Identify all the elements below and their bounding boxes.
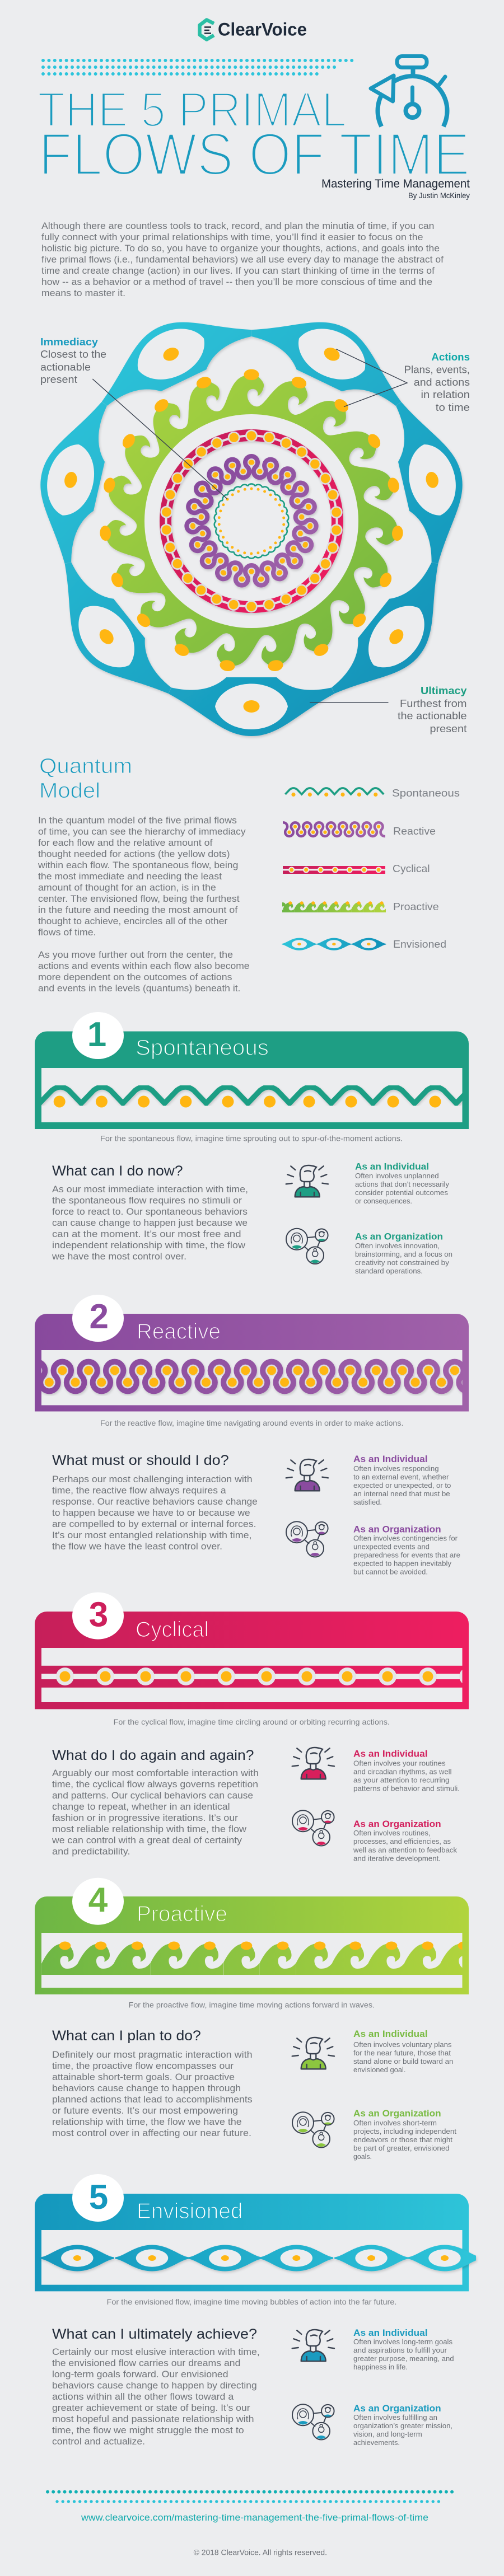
title: FLOWS OF TIME bbox=[39, 120, 470, 188]
quantum model text: flows of time. bbox=[38, 928, 96, 938]
body text: Perhaps our most challenging interaction with bbox=[52, 1474, 253, 1484]
body text: greater achievement or state of being. It’s our bbox=[52, 2403, 250, 2413]
body text: we can control with a great deal of certainty bbox=[52, 1835, 242, 1846]
body text: independent relationship with time, the flow bbox=[52, 1240, 245, 1250]
as an organization: well as an attention to feedback bbox=[353, 1846, 458, 1854]
body text: can cause change to happen just because we bbox=[52, 1218, 248, 1228]
caption: For the cyclical flow, imagine time circling around or orbiting recurring actions. bbox=[114, 1717, 390, 1726]
as an organization bbox=[353, 2109, 456, 2161]
intro text: five primal flows (i.e., fundamental behaviors) we all use every day to manage the abstract of bbox=[41, 255, 444, 265]
subtitle and byline: Mastering Time Management bbox=[321, 177, 470, 190]
as an individual: happiness in life. bbox=[353, 2363, 408, 2371]
icon: organization bbox=[292, 2112, 334, 2147]
banner: 5 bbox=[89, 2178, 108, 2217]
question heading: What can I ultimately achieve? bbox=[52, 2326, 257, 2342]
as an organization: be part of greater, envisioned bbox=[353, 2144, 449, 2152]
legend: reactive: Reactive bbox=[393, 826, 436, 837]
callout: actions: in relation bbox=[421, 389, 470, 400]
icon: individual bbox=[286, 1165, 328, 1197]
body text: behaviors cause change to happen through bbox=[52, 2083, 241, 2093]
body text: Definitely our most pragmatic interaction with bbox=[52, 2050, 253, 2060]
legend bbox=[279, 788, 460, 954]
panel: 2 reactive bbox=[27, 1295, 477, 1576]
banner: 2 bbox=[90, 1298, 109, 1336]
quantum model text: thought needed for actions (the yellow dots) bbox=[38, 849, 230, 859]
copyright: © 2018 ClearVoice. All rights reserved. bbox=[194, 2548, 327, 2557]
as an individual: greater purpose, meaning, and bbox=[353, 2354, 454, 2363]
banner: 4 bbox=[88, 1881, 108, 1919]
quantum model text: within each flow. The spontaneous flow, being bbox=[38, 860, 238, 870]
icon: individual bbox=[292, 2038, 334, 2069]
ring: cyclical flow bbox=[166, 435, 337, 607]
flow pattern: cyclical bbox=[41, 1666, 470, 1688]
intro text: fully connect with your primal relationships with time, you’ll find it easier to focus on the bbox=[41, 232, 423, 242]
as an individual: patterns of behavior and stimuli. bbox=[353, 1785, 460, 1792]
as an organization: As an Organization bbox=[353, 1525, 441, 1535]
banner: 3 bbox=[89, 1595, 108, 1634]
caption: For the spontaneous flow, imagine time sprouting out to spur-of-the-moment actions. bbox=[100, 1134, 403, 1143]
body text: planned actions that lead to accomplishments bbox=[52, 2095, 253, 2105]
quantum model text: more dependent on the outcomes of actions bbox=[38, 972, 232, 982]
icon: individual bbox=[286, 1459, 328, 1491]
question heading: What can I do now? bbox=[52, 1163, 183, 1179]
intro text: how -- as a behavior or a method of travel -- then you’ll be more conscious of time and the bbox=[41, 277, 432, 287]
body text: the spontaneous flow requires no stimuli or bbox=[52, 1196, 242, 1206]
body text: most reliable relationship with time, the flow bbox=[52, 1824, 246, 1834]
body text bbox=[52, 1184, 248, 1262]
as an individual: satisfied. bbox=[353, 1498, 382, 1506]
caption: For the envisioned flow, imagine time moving bubbles of action into the far future. bbox=[107, 2297, 396, 2306]
body text: Certainly our most elusive interaction with time, bbox=[52, 2347, 260, 2357]
heading: quantum model: Quantum bbox=[39, 755, 132, 778]
banner: Envisioned bbox=[137, 2199, 242, 2223]
as an organization: expected to happen inevitably bbox=[353, 1559, 452, 1568]
body text: fashion or in progressive iterations. It’s our bbox=[52, 1813, 239, 1823]
as an individual: and circadian rhythms, as well bbox=[353, 1768, 451, 1776]
decorative dotted rows bbox=[43, 60, 355, 74]
icon: organization bbox=[286, 1229, 328, 1264]
body text: change to repeat, whether in an identical bbox=[52, 1802, 230, 1812]
ring: proactive flow bbox=[95, 364, 409, 677]
question heading: What do I do again and again? bbox=[52, 1748, 254, 1763]
as an organization: Often involves short-term bbox=[353, 2119, 437, 2127]
callout: ultimacy: present bbox=[430, 723, 467, 734]
title: THE 5 PRIMAL bbox=[38, 82, 347, 137]
as an individual: As an Individual bbox=[353, 2029, 428, 2039]
icon: individual bbox=[292, 1748, 334, 1779]
body text: most control over in affecting our near future. bbox=[52, 2128, 251, 2138]
quantum model text: in the future and needing the most amount of bbox=[38, 905, 238, 915]
ring: envisioned flow bbox=[40, 322, 464, 738]
logo: ClearVoice: ClearVoice bbox=[218, 19, 307, 39]
leader lines bbox=[92, 349, 407, 702]
body text: long-term goals forward. Our envisioned bbox=[52, 2369, 228, 2380]
body text: time, the proactive flow encompasses our bbox=[52, 2061, 234, 2071]
body text: control and actualize. bbox=[52, 2437, 145, 2447]
as an organization bbox=[353, 1819, 458, 1863]
legend: spontaneous: Spontaneous bbox=[392, 788, 460, 799]
legend: proactive: Proactive bbox=[393, 901, 439, 912]
callout: actions: and actions bbox=[414, 377, 470, 388]
banner: Reactive bbox=[137, 1319, 221, 1343]
as an organization: Often involves innovation, bbox=[355, 1242, 440, 1250]
as an organization: projects, including independent bbox=[353, 2127, 456, 2135]
heading: quantum model bbox=[39, 755, 132, 803]
caption: For the reactive flow, imagine time navigating around events in order to make actions. bbox=[100, 1418, 403, 1427]
as an organization: As an Organization bbox=[353, 2404, 441, 2414]
body text: we have the most control over. bbox=[52, 1252, 186, 1262]
body text: and predictability. bbox=[52, 1847, 130, 1857]
as an organization bbox=[353, 1525, 460, 1576]
intro text: means to master it. bbox=[41, 288, 125, 298]
as an individual: an internal need that must be bbox=[353, 1490, 450, 1498]
body text: the envisioned flow carries our dreams and bbox=[52, 2358, 240, 2368]
quantum model text: amount of thought for an action, is in the bbox=[38, 883, 216, 893]
as an organization: and iterative development. bbox=[353, 1854, 441, 1863]
flow pattern: proactive bbox=[41, 1941, 463, 1975]
question heading: What must or should I do? bbox=[52, 1453, 229, 1468]
as an organization bbox=[355, 1232, 452, 1275]
quantum model text: In the quantum model of the five primal flows bbox=[38, 816, 237, 826]
question heading: What can I plan to do? bbox=[52, 2028, 201, 2044]
as an organization: preparedness for events that are bbox=[353, 1551, 460, 1559]
as an organization: unexpected events and bbox=[353, 1543, 430, 1551]
body text: response. Our reactive behaviors cause change bbox=[52, 1497, 258, 1507]
banner bbox=[35, 1295, 469, 1412]
flow pattern: reactive bbox=[27, 1362, 477, 1391]
banner bbox=[35, 1012, 469, 1129]
banner: Proactive bbox=[137, 1902, 227, 1926]
footer dotted rows bbox=[48, 2492, 457, 2502]
diagram: quantum model of the five flows bbox=[40, 322, 464, 738]
as an individual: consider potential outcomes bbox=[355, 1188, 448, 1197]
body text: As our most immediate interaction with time, bbox=[52, 1184, 248, 1195]
callout: actions: Actions bbox=[431, 352, 470, 363]
as an organization: processes, and efficiencies, as bbox=[353, 1837, 451, 1846]
legend: cyclical: Cyclical bbox=[393, 863, 430, 874]
quantum model text bbox=[38, 816, 250, 994]
legend: spontaneous bbox=[285, 788, 460, 799]
as an organization: Often involves routines, bbox=[353, 1829, 431, 1837]
body text: Arguably our most comfortable interaction with bbox=[52, 1768, 259, 1778]
as an organization: brainstorming, and a focus on bbox=[355, 1250, 452, 1258]
callout: immediacy: present bbox=[40, 374, 77, 385]
as an individual: envisioned goal. bbox=[353, 2066, 405, 2074]
body text: or future events. It’s our most empowering bbox=[52, 2106, 238, 2116]
as an individual: expected or unexpected, or to bbox=[353, 1481, 451, 1490]
subtitle and byline bbox=[321, 177, 470, 200]
body text: behaviors cause change to happen by directing bbox=[52, 2381, 257, 2391]
body text: and patterns. Our cyclical behaviors can cause bbox=[52, 1791, 253, 1801]
flow pattern: envisioned bbox=[41, 2245, 478, 2274]
as an individual bbox=[353, 2328, 454, 2371]
callout: ultimacy bbox=[398, 685, 467, 734]
banner bbox=[35, 1878, 469, 1994]
legend: cyclical bbox=[283, 863, 430, 874]
panel: 4 proactive bbox=[35, 1878, 469, 2161]
flow pattern: spontaneous bbox=[40, 1087, 498, 1107]
as an organization: organization’s greater mission, bbox=[353, 2422, 452, 2430]
title bbox=[38, 82, 470, 188]
callout: immediacy: Immediacy bbox=[40, 336, 98, 348]
as an individual: Often involves responding bbox=[353, 1464, 439, 1473]
body text: are compelled to by external or internal forces. bbox=[52, 1519, 256, 1529]
as an individual: As an Individual bbox=[353, 1454, 428, 1464]
body text: the flow we have the least control over. bbox=[52, 1542, 222, 1552]
subtitle and byline: By Justin McKinley bbox=[408, 191, 470, 200]
body text: actions within all the other flows toward a bbox=[52, 2392, 234, 2402]
as an organization: Often involves contingencies for bbox=[353, 1534, 458, 1543]
as an individual: stand alone or build toward an bbox=[353, 2057, 453, 2066]
intro text: Although there are countless tools to track, record, and plan the minutia of time, if you can bbox=[41, 221, 435, 231]
body text: time, the cyclical flow always governs repetition bbox=[52, 1779, 258, 1790]
banner bbox=[35, 1593, 469, 1709]
as an individual: actions that don’t necessarily bbox=[355, 1180, 450, 1188]
body text bbox=[52, 2050, 253, 2138]
ring: reactive flow bbox=[184, 454, 320, 590]
icon: stopwatch bbox=[371, 56, 447, 127]
as an individual bbox=[353, 2029, 453, 2074]
quantum model text: for each flow and the relative amount of bbox=[38, 838, 213, 848]
quantum model text: As you move further out from the center, the bbox=[38, 950, 233, 960]
intro text: time and create change (action) in our lives. If you can start thinking of time in the terms of bbox=[41, 266, 435, 276]
as an organization: but cannot be avoided. bbox=[353, 1568, 428, 1576]
as an organization: As an Organization bbox=[353, 1819, 441, 1829]
body text: force to react to. Our spontaneous behaviors bbox=[52, 1207, 248, 1217]
callout: ultimacy: Furthest from bbox=[400, 698, 467, 709]
as an individual: or consequences. bbox=[355, 1197, 412, 1205]
legend: reactive bbox=[279, 822, 436, 837]
quantum model text: and events in the levels (quantums) beneath it. bbox=[38, 983, 240, 994]
quantum model text: of time, you can see the hierarchy of immediacy bbox=[38, 827, 246, 837]
as an individual bbox=[353, 1749, 460, 1792]
callout: immediacy: actionable bbox=[40, 362, 91, 373]
legend: envisioned: Envisioned bbox=[393, 939, 446, 950]
body text: most hopeful and passionate relationship with bbox=[52, 2414, 254, 2424]
callout: immediacy: Closest to the bbox=[40, 349, 106, 360]
legend: proactive bbox=[282, 901, 438, 912]
as an individual: As an Individual bbox=[353, 1749, 428, 1759]
as an organization: creativity not constrained by bbox=[355, 1258, 450, 1267]
as an individual bbox=[355, 1162, 450, 1205]
as an organization: vision, and long-term bbox=[353, 2430, 422, 2438]
legend: envisioned bbox=[282, 938, 446, 950]
quantum model text: thought to achieve, encircles all of the other bbox=[38, 916, 228, 926]
as an individual: Often involves your routines bbox=[353, 1759, 446, 1768]
body text: can at the moment. It’s our most free and bbox=[52, 1229, 241, 1239]
icon: organization bbox=[292, 2404, 334, 2439]
banner: Cyclical bbox=[136, 1618, 209, 1642]
callout: actions: to time bbox=[436, 402, 470, 413]
body text: time, the flow we might struggle the most to bbox=[52, 2425, 244, 2436]
banner: 1 bbox=[87, 1015, 106, 1054]
icon: individual bbox=[292, 2330, 334, 2361]
banner: Spontaneous bbox=[136, 1036, 269, 1060]
as an individual: Often involves long-term goals bbox=[353, 2338, 452, 2346]
callout: actions bbox=[404, 352, 470, 413]
body text bbox=[52, 2347, 260, 2447]
as an individual: as your attention to recurring bbox=[353, 1776, 449, 1785]
panel: 3 cyclical bbox=[35, 1593, 470, 1863]
as an individual: As an Individual bbox=[353, 2328, 428, 2338]
body text bbox=[52, 1474, 258, 1552]
as an individual: As an Individual bbox=[355, 1162, 429, 1172]
body text: to happen because we have to or because we bbox=[52, 1508, 250, 1518]
as an individual: Often involves unplanned bbox=[355, 1172, 439, 1180]
as an individual: and aspirations to fulfill your bbox=[353, 2346, 447, 2354]
as an individual: for the near future, those that bbox=[353, 2049, 451, 2057]
intro text: holistic big picture. To do so, you have to organize your thoughts, actions, and goals into the bbox=[41, 243, 440, 254]
as an organization: achievements. bbox=[353, 2438, 400, 2447]
body text: attainable short-term goals. Our proactive bbox=[52, 2072, 235, 2082]
heading: quantum model: Model bbox=[39, 779, 100, 803]
body text: time, the reactive flow always requires a bbox=[52, 1486, 226, 1496]
as an organization: As an Organization bbox=[355, 1232, 443, 1242]
icon: organization bbox=[292, 1810, 334, 1846]
quantum model text: center. The envisioned flow, being the furthest bbox=[38, 894, 240, 904]
intro text bbox=[41, 221, 444, 298]
caption: For the proactive flow, imagine time moving actions forward in waves. bbox=[129, 2001, 375, 2010]
as an individual: Often involves voluntary plans bbox=[353, 2040, 451, 2049]
footer link: www.clearvoice.com/mastering-time-management-the-five-primal-flows-of-time bbox=[81, 2512, 428, 2523]
body text: relationship with time, the flow we have the bbox=[52, 2117, 242, 2127]
as an individual bbox=[353, 1454, 451, 1506]
panel: 1 spontaneous bbox=[35, 1012, 498, 1275]
quantum model text: the most immediate and needing the least bbox=[38, 872, 222, 882]
as an organization: As an Organization bbox=[353, 2109, 441, 2119]
as an organization: endeavors or those that might bbox=[353, 2135, 452, 2144]
as an individual: to an external event, whether bbox=[353, 1473, 449, 1481]
as an organization: Often involves fulfilling an bbox=[353, 2413, 437, 2422]
banner bbox=[35, 2174, 469, 2291]
icon: organization bbox=[286, 1521, 328, 1557]
callout: actions: Plans, events, bbox=[404, 364, 470, 375]
callout: immediacy bbox=[40, 336, 106, 385]
as an organization bbox=[353, 2404, 452, 2447]
quantum model text: actions and events within each flow also become bbox=[38, 961, 250, 971]
callout: ultimacy: Ultimacy bbox=[421, 685, 467, 696]
body text bbox=[52, 1768, 259, 1857]
ring: spontaneous flow bbox=[214, 484, 289, 559]
body text: It’s our most entangled relationship with time, bbox=[52, 1530, 252, 1540]
as an organization: standard operations. bbox=[355, 1267, 423, 1275]
as an organization: goals. bbox=[353, 2152, 372, 2161]
panel: 5 envisioned bbox=[34, 2174, 476, 2447]
callout: ultimacy: the actionable bbox=[398, 710, 467, 722]
